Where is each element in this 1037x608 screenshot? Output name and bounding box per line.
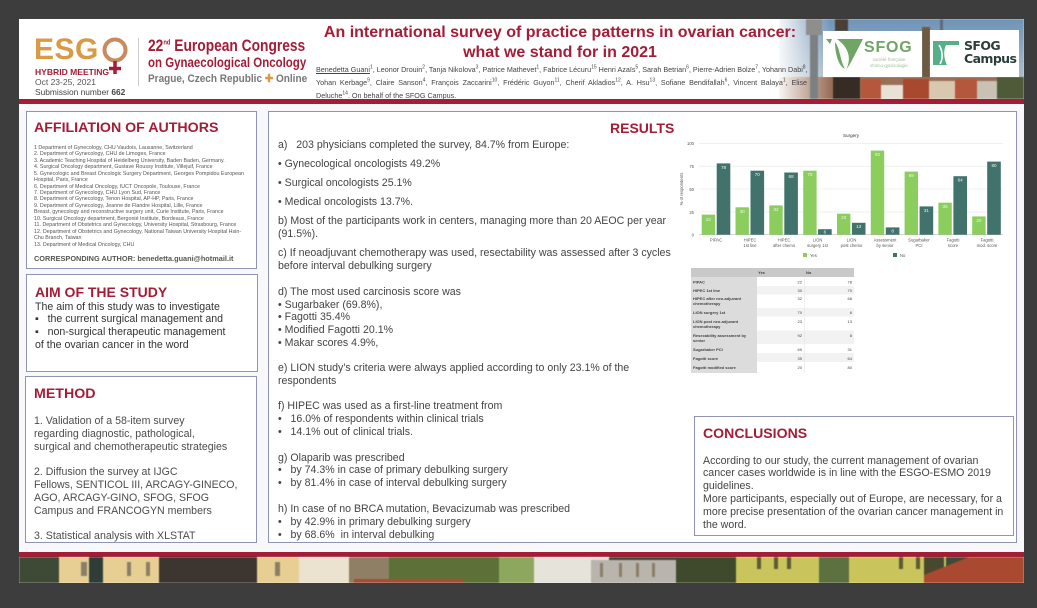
row values: 30 [798,288,803,293]
method step 2: 2. Diffusion the survey at IJGC [34,466,177,478]
affiliation list: 12. Department of Obstetrics and Gynecology, National Taiwan University Hospital Hsin- [34,229,241,235]
finding d: • Sugarbaker (69.8%), [278,299,382,311]
table header: No [806,270,812,275]
finding b: (91.5%). [278,228,318,240]
finding b [278,215,666,240]
row values: 20 [798,365,803,370]
specialty medical: • Medical oncologists 13.7%. [278,196,413,208]
row values: 69 [798,347,803,352]
category labels: PIPAC [710,238,722,242]
aim text [35,301,226,351]
SFOG tagline: d'onco-gynécologie [870,62,908,68]
finding e: e) LION study's criteria were always applied according to only 23.1% of the [278,362,629,374]
SFOG Campus badge [930,30,1019,77]
bar chart: surgery: 75 [689,164,695,169]
affiliation list: 7. Department of Gynecology, CHU Lyon Sud, France [34,190,160,196]
row labels: HIPEC after neo-adjuvant [693,296,742,301]
row labels: Fagotti modified score [693,365,737,370]
congress name: 22nd European Congress [148,37,305,55]
bar values: 35 [943,204,948,209]
finding c: c) If neoadjuvant chemotherapy was used, resectability was assessed after 3 cycles [278,247,671,259]
finding d: • Modified Fagotti 20.1% [278,324,393,336]
icon: female symbol [102,38,128,74]
category labels: after chemo [773,243,796,248]
category labels: LION [847,238,856,242]
affiliation list: 4. Surgical Oncology department, Gustave Roussy Institute, Villejuif, France [34,164,213,170]
bar values: 80 [991,163,997,168]
row values: 64 [848,356,853,361]
category labels: HIPEC [778,238,790,242]
finding d: • Makar scores 4.9%, [278,337,378,349]
row values: 35 [798,356,803,361]
congress location: Prague, Czech Republic ✚ Online [148,73,307,85]
hybrid meeting label: HYBRID MEETING [35,67,109,77]
affiliation list: 11. Department of Obstetrics and Gynecology, University Hospital, Strasbourg, France [34,222,236,228]
footer city photo [19,556,1024,583]
bar chart: surgery: 25 [689,210,695,215]
panel: aim of the study [26,274,258,372]
row labels: HIPEC 1st line [693,288,721,293]
SFOG wordmark: SFOG [864,39,913,56]
finding c: before interval debulking surgery [278,260,432,272]
heading: results: RESULTS [610,120,674,136]
bar values: 64 [958,178,963,182]
congress subject: on Gynaecological Oncology [148,54,306,70]
panel: method [25,376,257,543]
method step 2: AGO, ARCAGY-GINO, SFOG, SFOG [34,492,209,504]
category labels: by senior [876,243,894,248]
bars: no [717,162,1001,235]
author list: Benedetta Guani1, Leonor Drouin2, Tanja Nikolova3, Patrice Mathevet1, Fabrice Lécuru15 Henri Azaïs5, Sarah Betrian6, Pierre-Adrien Bolze7, Yohann Dabi8, [316,64,808,74]
row labels: senior [693,338,705,343]
conclusions text: guidelines. [703,480,754,492]
row values: 23 [798,319,803,324]
data table [691,268,854,373]
row labels: LION surgery 1st [693,310,726,315]
icon: campus mark [933,41,959,65]
row values: 13 [848,319,853,324]
method step 2: Campus and FRANCOGYN members [34,505,212,517]
method step 1 [34,415,227,453]
author list: Yohan Kerbage9, Claire Sanson4, François Zaccarini10, Frédéric Guyon11, Cherif Akladios12, A. Hsu13, Sofiane Bendifallah6, Vincent Balaya1, Elise [316,77,807,86]
row labels: chemotherapy [693,324,721,329]
finding h: • by 42.9% in primary debulking surgery [278,516,471,528]
header city photo [779,19,1024,99]
SFOG tagline: société française [873,57,905,62]
bar values: 32 [773,207,779,212]
footer red rule [19,552,1024,557]
row labels: LION post neo-adjuvant [693,319,739,324]
aim text: of the ovarian cancer in the word [35,339,189,351]
finding h: h) In case of no BRCA mutation, Bevacizumab was prescribed [278,502,570,514]
row labels: Sugarbaker PCI [693,347,723,352]
bar values: 70 [755,172,760,177]
affiliation list: 2. Department of Gynecology, CHU de Limoges, France [34,151,166,157]
row labels: Fagotti score [693,356,719,361]
finding g: • by 81.4% in case of interval debulking surgery [278,477,507,489]
category labels: mod. score [977,243,998,248]
conclusions text: According to our study, the current management of ovarian [703,454,978,466]
finding h [278,502,570,540]
bar values: 92 [875,152,880,157]
heading: affiliation: AFFILIATION OF AUTHORS [34,120,218,136]
bar chart: surgery: 50 [689,187,695,192]
SFOG tagline [870,57,908,68]
category labels: PCI [916,243,922,248]
table header: Yes [758,270,766,275]
method step 1: surgical and chemotherapeutic strategies [34,441,227,453]
finding c [278,247,671,272]
bar values: 30 [740,209,745,214]
row values: 80 [848,365,853,370]
header band [19,19,1024,99]
finding e: respondents [278,375,336,387]
bar values: 78 [721,165,726,170]
heading: aim: AIM OF THE STUDY [35,284,167,300]
finding a: a) 203 physicians completed the survey, 84.7% from Europe: [278,139,569,151]
legend: No [900,253,906,258]
poster title: what we stand for in 2021 [463,44,657,61]
affiliation list: 10. Surgical Oncology department, Bergonié Institute, Bordeaux, France [34,216,204,222]
logo divider [138,38,139,86]
chart title: Surgery [843,133,860,138]
row values: 32 [798,296,803,301]
finding g [278,452,508,489]
panel: affiliation of authors [26,111,257,269]
bar values: 6 [824,230,827,234]
bar values: 8 [891,228,894,234]
campus wordmark: SFOG [964,38,1000,53]
row labels: Resecability assessment by [693,333,747,338]
ESGO wordmark: ESG [34,33,99,66]
bar values: 69 [909,173,914,178]
category labels: 1st line [743,243,757,248]
category labels: score [948,243,959,248]
specialty surgical: • Surgical oncologists 25.1% [278,177,412,189]
bar values: 68 [789,174,794,179]
affiliation list: Hospital, Paris, France [34,177,88,183]
row labels: PIPAC [693,280,705,284]
row values: 8 [850,333,853,338]
bar values [706,152,997,234]
panel: results [268,111,1017,543]
conclusions text: More participants, especially out of Europe, are necessary, for a [703,493,1002,505]
finding g: g) Olaparib was prescribed [278,452,405,464]
campus wordmark: Campus [964,51,1016,66]
bar values: 70 [807,172,813,177]
affiliation list: 5. Gynecologic and Breast Oncologic Surgery Department, Georges Pompidou European [34,171,244,177]
table header [758,270,812,275]
category labels: post chemo [841,243,863,248]
row values: 70 [848,288,853,293]
finding f [278,400,502,438]
affiliation list [34,145,244,248]
affiliation list: 13. Department of Medical Oncology, CHU [34,242,134,248]
bar values: 13 [856,224,862,229]
row values: 92 [798,333,803,338]
row values: 78 [848,280,853,284]
row values [798,280,853,370]
submission number: Submission number 662 [35,87,125,97]
bar values: 31 [924,208,929,213]
row labels: chemotherapy [693,301,721,306]
bar values: 22 [706,217,711,222]
heading: method: METHOD [34,386,95,402]
method step 2: Fellows, SENTICOL III, ARCAGY-GINECO, [34,479,237,491]
conclusions text: the word. [703,519,747,531]
aim text: ▪ the current surgical management and [35,313,223,325]
category labels: surgery 1st [807,243,829,248]
affiliation list: Chu Branch, Taiwan [34,235,81,241]
poster title [324,24,796,61]
specialty gynecological: • Gynecological oncologists 49.2% [278,158,440,170]
row values: 6 [850,310,853,315]
legend [803,253,906,258]
method step 2 [34,466,237,517]
bar chart: surgery: 100 [687,141,695,146]
finding f: f) HIPEC was used as a first-line treatment from [278,400,502,412]
finding f: • 16.0% of respondents within clinical trials [278,413,484,425]
SFOG logo [823,31,922,77]
bar chart: surgery: 0 [692,232,695,238]
affiliation list: 9. Department of Gynecology, Jeanne de Flandre Hospital, Lille, France [34,203,203,209]
method step 1: regarding diagnostic, pathological, [34,428,195,440]
conclusions text [703,454,1003,531]
finding f: • 14.1% out of clinical trials. [278,426,413,438]
conclusions text: cancer cases worldwide is in line with the ESGO-ESMO 2019 [703,467,991,479]
aim text: ▪ non-surgical therapeutic management [35,326,225,338]
row values: 22 [798,280,803,284]
affiliation list: 8. Department of Gynecology, Tenon Hospital, AP-HP, Paris, France [34,196,193,202]
row labels [693,280,747,370]
congress date: Oct 23-25, 2021 [35,77,96,87]
affiliation list: 1 Department of Gynecology, CHU Vaudois, Lausanne, Switzerland [34,145,193,151]
ESGO logo [34,33,128,97]
category labels [710,238,998,248]
legend: Yes [810,253,817,258]
row values: 68 [848,296,853,301]
results text column [278,139,671,540]
category labels: Fagotti [947,238,959,242]
conclusions text: more precise presentation of the ovarian cancer management in [703,506,1003,518]
method step 3: 3. Statistical analysis with XLSTAT [34,530,196,542]
finding h: • by 68.6% in interval debulking [278,528,434,540]
author list: Deluche14. On behalf of the SFOG Campus. [316,90,456,100]
bars: yes [702,151,986,235]
category labels: Fagotti [981,238,993,242]
category labels: HIPEC [744,238,756,242]
category labels: LION [813,238,822,242]
icon: SFOG mark [826,39,863,70]
row values: 31 [848,347,853,352]
congress title [148,37,307,85]
finding b: b) Most of the participants work in centers, managing more than 20 AEOC per year [278,215,666,227]
affiliation list: 6. Department of Medical Oncology, IUCT Oncopole, Toulouse, France [34,184,200,190]
aim text: The aim of this study was to investigate [35,301,220,313]
affiliation list: Breast, gynecology and reconstructive surgery unit, Curie Institute, Paris, France [34,209,224,215]
finding d: • Fagotti 35.4% [278,311,350,323]
finding g: • by 74.3% in case of primary debulking surgery [278,464,508,476]
heading: conclusions: CONCLUSIONS [703,424,807,440]
author list [316,64,808,100]
finding e [278,362,629,387]
affiliation list: 3. Academic Teaching Hospital of Heidelberg University, Baden Baden, Germany. [34,158,225,164]
campus wordmark [964,38,1016,66]
row values: 70 [798,310,803,315]
category labels: Assessment [874,238,897,242]
header red rule [19,99,1024,104]
corresponding author: CORRESPONDING AUTHOR: benedetta.guani@hotmail.it [34,254,233,263]
finding d [278,286,461,349]
bar chart: surgery [680,133,1003,258]
category labels: Sugarbaker [908,238,930,242]
panel: conclusions [694,416,1014,536]
bar values: 23 [841,215,847,220]
poster title: An international survey of practice patterns in ovarian cancer: [324,24,796,41]
method step 1: 1. Validation of a 58-item survey [34,415,185,427]
bar values: 20 [976,218,982,223]
finding d: d) The most used carcinosis score was [278,286,461,298]
